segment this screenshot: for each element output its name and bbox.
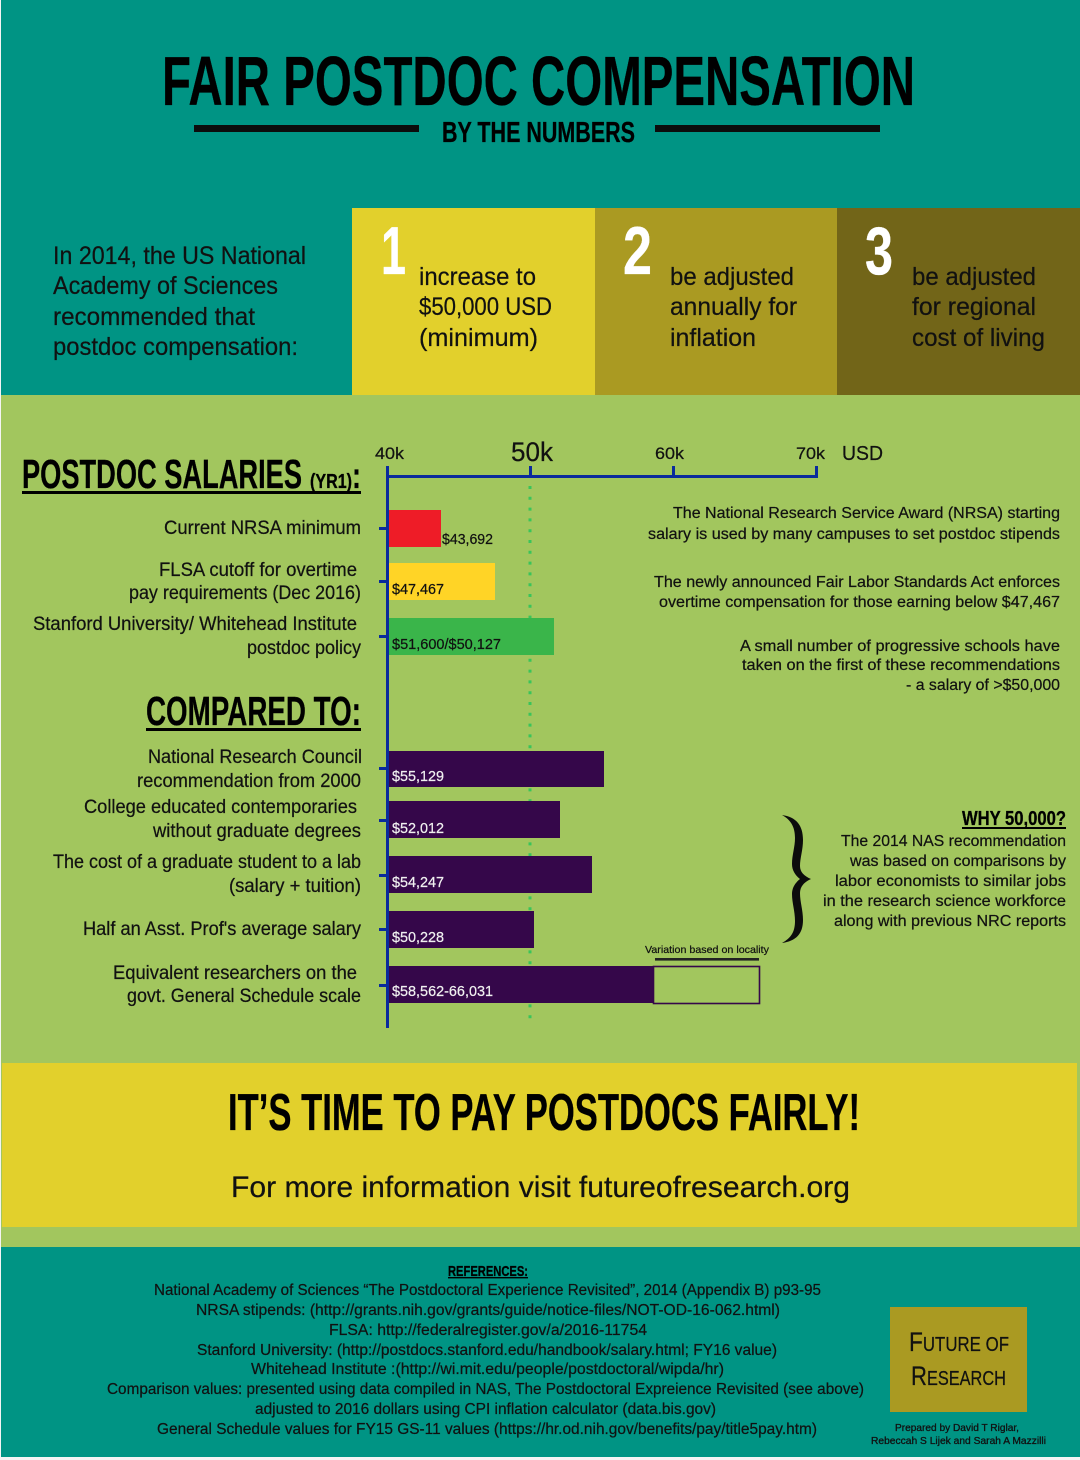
references — [107, 1263, 864, 1438]
subtitle: by the numbers: BY THE NUMBERS — [442, 117, 635, 149]
panel: chart background — [1, 395, 1080, 1247]
title block — [162, 42, 915, 149]
credits: Rebeccah S Lijek and Sarah A Mazzilli — [871, 1436, 1046, 1447]
references: NRSA stipends: (http://grants.nih.gov/grants/guide/notice-files/NOT-OD-16-062.html) — [196, 1302, 780, 1319]
axes — [379, 466, 818, 1028]
annotation: progressive schools: taken on the first of these recommendations — [742, 657, 1060, 674]
references: FLSA: http://federalregister.gov/a/2016-11754 — [329, 1322, 647, 1339]
axis labels: 40k — [375, 444, 405, 463]
intro text — [53, 242, 306, 361]
bar: Stanford / Whitehead — [389, 618, 554, 655]
comparison category labels: govt. General Schedule scale — [127, 986, 361, 1007]
bar: college educated contemporaries: $52,012 — [392, 821, 444, 837]
salary category labels: postdoc policy — [247, 638, 361, 659]
axis labels: 50k — [511, 437, 553, 467]
references: National Academy of Sciences “The Postdoctoral Experience Revisited”, 2014 (Appendix B) p93-95 — [154, 1282, 821, 1299]
comparison category labels: National Research Council — [148, 747, 362, 768]
annotation: NRSA: salary is used by many campuses to set postdoc stipends — [648, 526, 1060, 543]
bar: graduate student cost — [389, 856, 592, 893]
panel: recommendation 1: (minimum) — [419, 324, 538, 352]
salary category labels: pay requirements (Dec 2016) — [129, 583, 361, 604]
bar chart — [375, 437, 883, 1028]
references: Whitehead Institute :(http://wi.mit.edu/people/postdoctoral/wipda/hr) — [251, 1361, 724, 1378]
panel: recommendation 1: increase to — [419, 263, 536, 291]
logo: future of research: FUTURE OF — [909, 1327, 1009, 1357]
bar: general schedule range: $58,562-66,031 — [392, 984, 493, 1000]
annotation: progressive schools — [740, 638, 1060, 694]
intro text: recommended that — [53, 303, 255, 331]
icon: curly brace — [782, 815, 811, 943]
panel: recommendation 2: be adjusted — [670, 263, 794, 291]
panel: recommendation 1: $50,000 USD — [419, 293, 552, 321]
credits: Prepared by David T Riglar, — [895, 1423, 1019, 1434]
bar: half an assistant professor salary: $50,228 — [392, 930, 444, 946]
bar: half an assistant professor salary — [389, 911, 534, 948]
website line: For more information visit futureofresearch.org — [231, 1171, 850, 1204]
annotation: FLSA: The newly announced Fair Labor Standards Act enforces — [654, 574, 1060, 591]
annotation: progressive schools: A small number of progressive schools have — [740, 638, 1060, 655]
comparison category labels: without graduate degrees — [152, 821, 361, 842]
bar: Stanford / Whitehead: $51,600/$50,127 — [392, 637, 501, 653]
heading: postdoc salaries: : — [352, 455, 361, 496]
salary category labels: Stanford University/ Whitehead Institute — [33, 614, 357, 635]
subtitle: by the numbers — [194, 117, 880, 149]
bar: current NRSA minimum: $43,692 — [442, 532, 493, 548]
bar: FLSA cutoff: $47,467 — [392, 582, 444, 598]
references: Stanford University: (http://postdocs.stanford.edu/handbook/salary.html; FY16 value) — [197, 1342, 777, 1359]
comparison category labels — [53, 747, 362, 1007]
panel: recommendation 3: cost of living — [912, 324, 1045, 352]
variation note: Variation based on locality — [645, 944, 770, 956]
panel: recommendation 2: annually for — [670, 293, 797, 321]
comparison category labels: Half an Asst. Prof's average salary — [83, 919, 361, 940]
references: General Schedule values for FY15 GS-11 values (https://hr.od.nih.gov/benefits/pay/title5pay.htm) — [157, 1421, 817, 1438]
intro text: In 2014, the US National — [53, 242, 306, 270]
references: Comparison values: presented using data compiled in NAS, The Postdoctoral Expreience Revisited (see above) — [107, 1381, 864, 1398]
callout: why 50,000: in the research science workforce — [823, 893, 1066, 910]
bar: FLSA cutoff — [389, 563, 495, 600]
panel: recommendation 3: for regional — [912, 293, 1036, 321]
references: adjusted to 2016 dollars using CPI inflation calculator (data.bis.gov) — [255, 1401, 716, 1418]
intro text: Academy of Sciences — [53, 272, 278, 300]
logo: future of research: RESEARCH — [911, 1361, 1006, 1391]
annotation: progressive schools: - a salary of >$50,000 — [906, 677, 1060, 694]
axis labels: USD — [842, 443, 883, 465]
callout: why 50,000: along with previous NRC reports — [834, 913, 1066, 930]
heading: postdoc salaries: (YR1) — [310, 471, 352, 493]
comparison category labels: recommendation from 2000 — [137, 771, 361, 792]
bar: college educated contemporaries — [389, 801, 560, 838]
panel: recommendation 1: 1 — [381, 213, 406, 289]
axis labels — [375, 437, 883, 467]
salary category labels — [33, 518, 361, 659]
comparison category labels: College educated contemporaries — [84, 797, 357, 818]
bar: National Research Council: $55,129 — [392, 769, 444, 785]
annotation: FLSA — [654, 574, 1060, 611]
bar: general schedule range — [389, 966, 760, 1004]
axis labels: 60k — [655, 444, 685, 463]
panel: recommendation 2 — [595, 208, 837, 395]
panel: call to action banner — [2, 1063, 1077, 1227]
panel: recommendation 2: 2 — [623, 213, 652, 289]
bar: National Research Council — [389, 751, 604, 787]
callout: why 50,000: labor economists to similar jobs — [835, 873, 1066, 890]
comparison category labels: (salary + tuition) — [229, 876, 361, 897]
panel: recommendation 3 — [837, 208, 1080, 395]
comparison category labels: The cost of a graduate student to a lab — [53, 852, 361, 873]
bar: graduate student cost: $54,247 — [392, 875, 444, 891]
heading: compared to — [146, 688, 361, 734]
references heading: REFERENCES: — [448, 1263, 528, 1280]
bar: current NRSA minimum — [389, 510, 493, 548]
panel: recommendation 1 — [352, 208, 595, 395]
logo: future of research — [890, 1307, 1027, 1412]
intro text: postdoc compensation: — [53, 333, 298, 361]
annotation: FLSA: overtime compensation for those earning below $47,467 — [659, 594, 1060, 611]
callout: why 50,000: was based on comparisons by — [849, 853, 1066, 870]
axis labels: 70k — [796, 444, 826, 463]
comparison category labels: Equivalent researchers on the — [113, 963, 357, 984]
salary category labels: FLSA cutoff for overtime — [159, 560, 357, 581]
heading: compared to: COMPARED TO: — [146, 688, 361, 734]
panel: recommendation 3: 3 — [865, 213, 893, 289]
panel: recommendation 2: inflation — [670, 324, 756, 352]
heading: postdoc salaries: POSTDOC SALARIES — [22, 451, 302, 497]
annotation: NRSA: The National Research Service Award (NRSA) starting — [673, 505, 1060, 522]
credits — [871, 1423, 1046, 1447]
annotation: NRSA — [648, 505, 1060, 543]
salary category labels: Current NRSA minimum — [164, 518, 361, 539]
callout: why 50,000 — [823, 808, 1066, 930]
callout: why 50,000: The 2014 NAS recommendation — [841, 833, 1066, 850]
panel: recommendation 3: be adjusted — [912, 263, 1036, 291]
